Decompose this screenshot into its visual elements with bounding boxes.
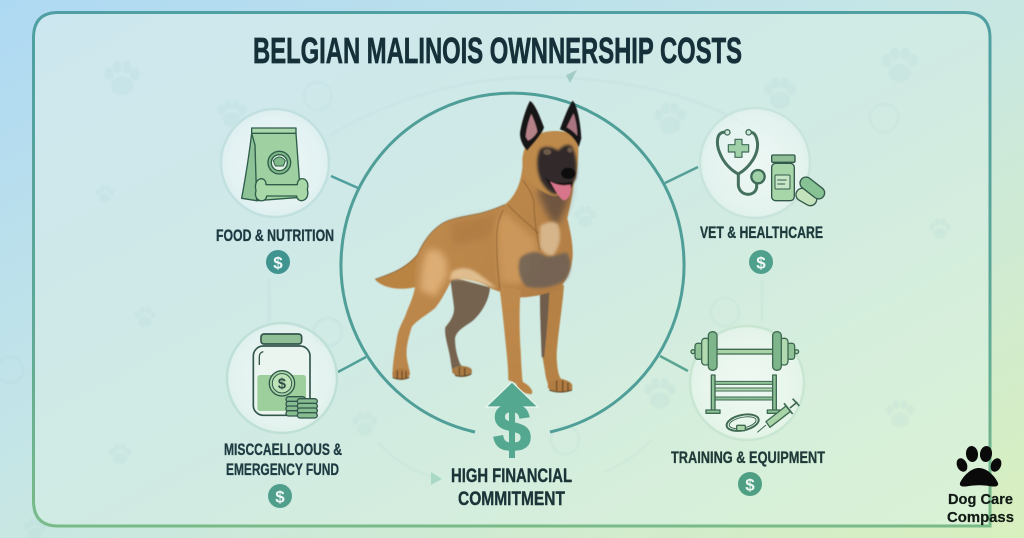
logo text	[947, 491, 1014, 526]
near hind toes	[393, 371, 409, 379]
dollar badge: $	[273, 254, 283, 272]
head	[522, 131, 578, 196]
label: EMERGENCY FUND	[226, 460, 339, 479]
label: MISCCAELLOOUS &	[224, 440, 342, 459]
dollar badge: $	[275, 488, 285, 506]
icon: stethoscope, bottle and pills	[717, 130, 827, 208]
far hind leg	[445, 277, 490, 376]
central circle	[341, 93, 684, 432]
high financial commitment label: COMMITMENT	[458, 488, 565, 510]
logo: Dog Care Compass	[947, 445, 1014, 526]
training and equipment item	[671, 326, 825, 496]
neck shading	[537, 187, 572, 227]
label: FOOD & NUTRITION	[216, 226, 334, 245]
dollar badge: $	[745, 476, 755, 494]
high financial commitment label: HIGH FINANCIAL	[451, 465, 572, 487]
near front paw	[514, 379, 534, 396]
left inner ear	[526, 114, 537, 141]
label: TRAINING & EQUIPMENT	[671, 448, 825, 467]
logo text: Dog Care	[948, 491, 1013, 508]
icon: food bag with bone	[242, 128, 308, 201]
far front toes	[549, 381, 572, 392]
far hind paw	[452, 366, 472, 376]
far leg shadow	[540, 292, 549, 358]
icon disc	[700, 108, 810, 218]
icon disc	[221, 109, 329, 217]
belly highlight	[449, 268, 497, 288]
icon: paw	[955, 445, 1003, 487]
miscellaneous and emergency fund item	[224, 323, 342, 508]
big dollar arrow icon	[486, 382, 538, 466]
haunch highlight	[420, 249, 447, 297]
left ear	[520, 101, 544, 151]
dollar badge: $	[756, 254, 766, 272]
far hind toes	[455, 367, 471, 376]
right inner ear	[567, 113, 577, 136]
near hind paw	[392, 368, 410, 380]
dollar badge	[268, 484, 292, 508]
tail	[375, 252, 419, 289]
chest light fur	[540, 222, 560, 255]
chest dark patch	[519, 252, 570, 288]
bottom arrow head	[431, 472, 442, 485]
dollar badge	[749, 250, 773, 274]
dog illustration	[375, 101, 581, 396]
far front paw	[548, 380, 572, 392]
label	[224, 440, 342, 479]
nose	[561, 168, 576, 179]
vet and healthcare item	[700, 108, 827, 274]
icon: jar with coins	[253, 334, 317, 418]
shoulder highlight	[497, 212, 537, 285]
mouth	[544, 176, 573, 192]
icon: jar with coins: $	[278, 377, 286, 393]
dollar badge	[266, 250, 290, 274]
food and nutrition item	[216, 109, 334, 274]
body	[393, 137, 574, 378]
coat line work	[375, 180, 540, 290]
far front leg	[540, 285, 572, 392]
dollar stem	[509, 400, 515, 458]
tongue	[550, 181, 571, 200]
dollar badge	[738, 472, 762, 496]
eyes	[543, 149, 551, 155]
arrow head	[486, 382, 538, 407]
logo text: Compass	[947, 509, 1014, 526]
high financial commitment label	[451, 465, 572, 510]
small top arrow	[566, 70, 577, 83]
near front leg	[499, 287, 532, 394]
icon disc	[227, 323, 337, 433]
connector: training	[660, 356, 688, 371]
dark mask	[537, 145, 577, 194]
connector: vet	[665, 167, 698, 183]
dollar sign: $	[493, 390, 531, 466]
back shading	[450, 213, 497, 247]
connector: miscellaneous	[338, 357, 366, 372]
right ear	[560, 101, 581, 147]
label: VET & HEALTHCARE	[700, 223, 823, 242]
icon: barbell, hurdle, collar and syringe	[691, 332, 799, 434]
title: BELGIAN MALINOIS OWNNERSHIP COSTS	[253, 30, 742, 71]
icon disc	[690, 326, 804, 440]
connector: food	[331, 176, 358, 188]
